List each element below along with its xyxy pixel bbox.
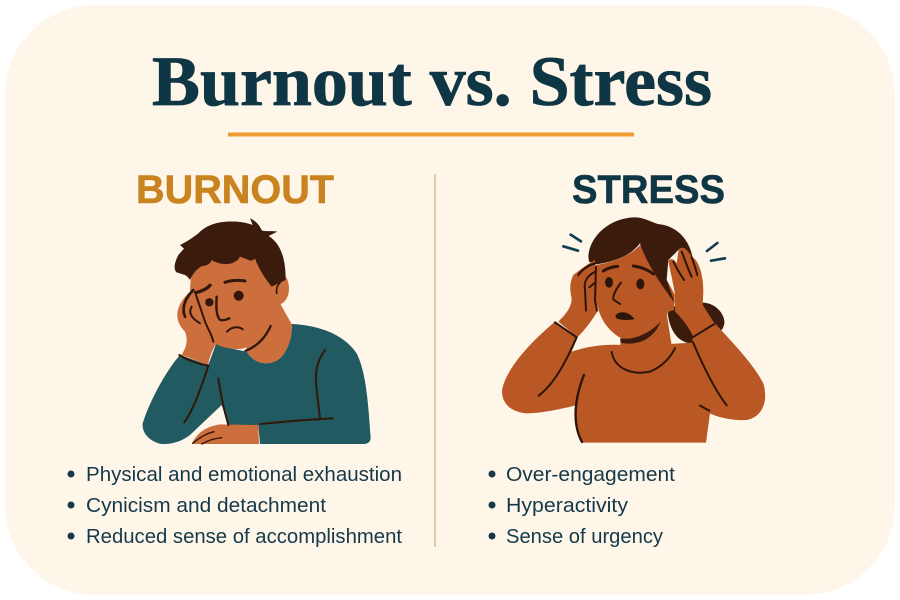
list: stress traits: Sense of urgency [506,526,663,548]
list: burnout traits [68,464,402,548]
center divider [434,174,436,547]
illustration: stressed woman [502,217,765,443]
list: stress traits: Over-engagement [506,464,675,486]
list: burnout traits: Cynicism and detachment [86,495,326,517]
list: burnout traits: Reduced sense of accomplishment [86,526,402,548]
list: burnout traits: Physical and emotional exhaustion [86,464,402,486]
list: stress traits: Hyperactivity [506,495,628,517]
list: stress traits [488,464,675,548]
title: Burnout vs. Stress [152,43,712,121]
heading: stress: STRESS [572,168,725,212]
illustration: exhausted man [143,218,371,444]
heading: burnout: BURNOUT [136,168,334,212]
title underline [228,132,634,136]
icon: stress marks [563,235,725,261]
